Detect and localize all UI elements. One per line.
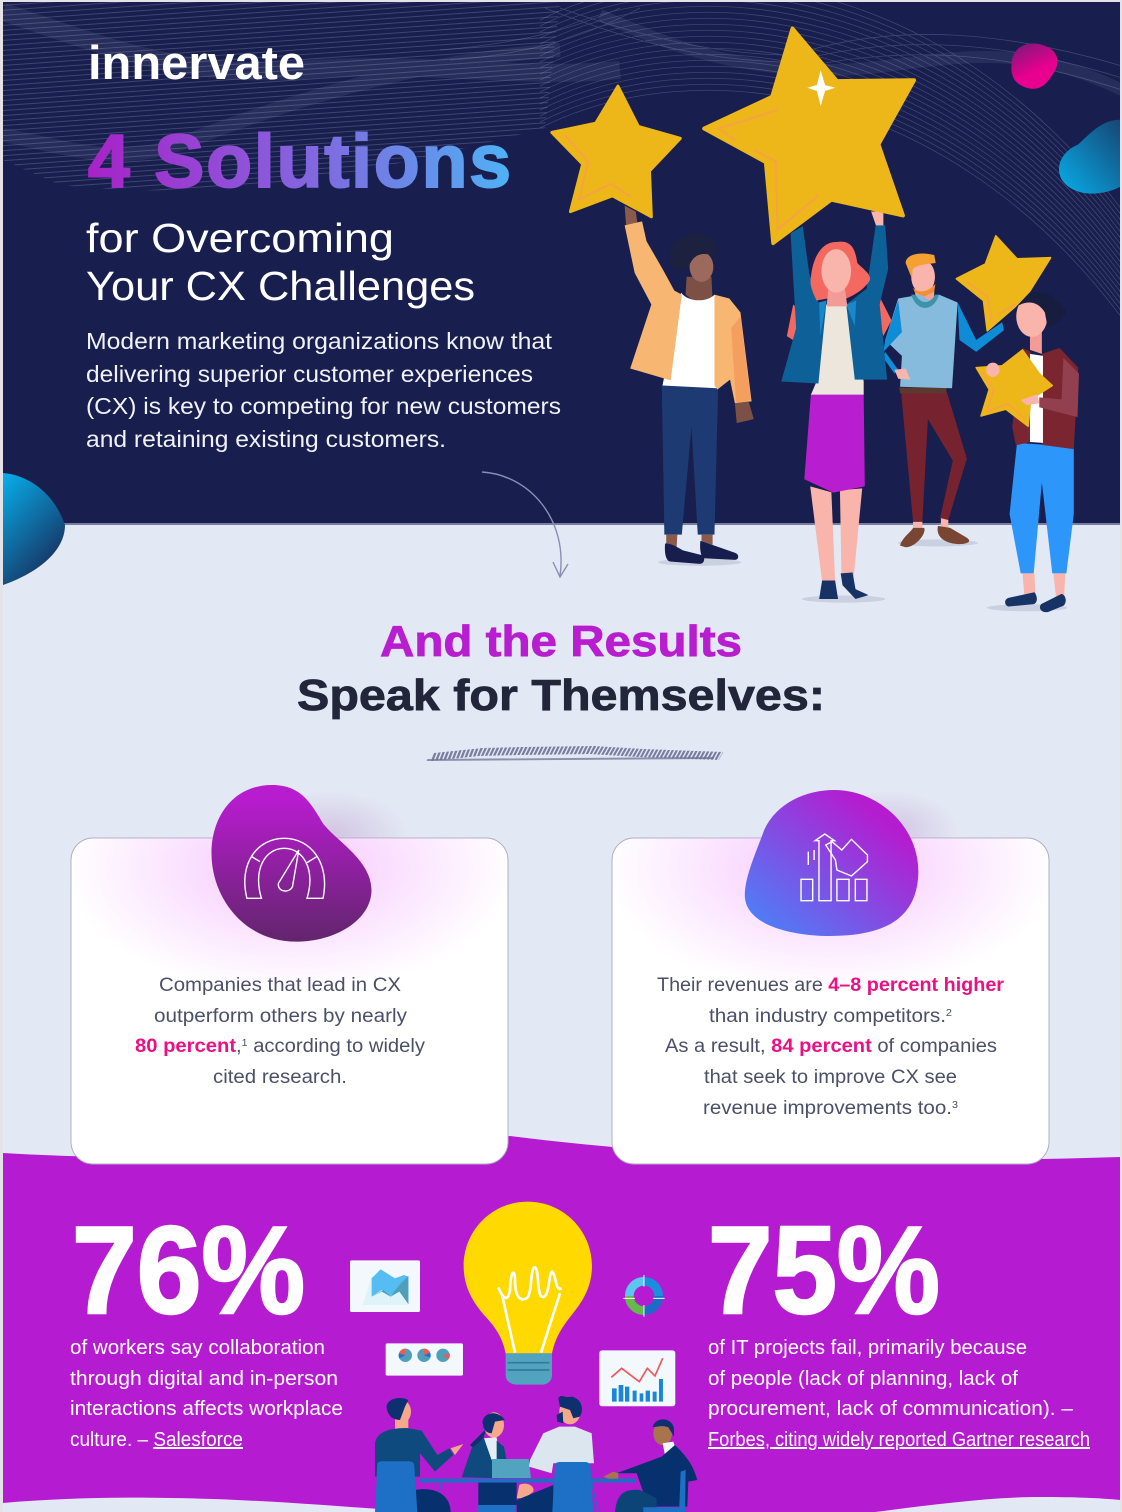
card text: 80 percent , [135, 1036, 241, 1057]
glow [637, 838, 1022, 976]
icon: line and bar chart card [599, 1350, 675, 1406]
soft shadow above cards [310, 798, 944, 838]
person: woman in blue jacket [781, 212, 892, 599]
icon: lightbulb [464, 1202, 592, 1385]
person: man in peach jacket [625, 206, 754, 564]
squiggle divider [427, 750, 724, 760]
stat: 75%: 75% [708, 1202, 940, 1340]
person: man in blue shirt [883, 253, 1004, 547]
bottom left wave [3, 1498, 390, 1512]
title: 4 Solutions: 4 Solutions [88, 119, 511, 203]
card text [135, 975, 426, 1088]
stat text: IT projects [708, 1337, 1090, 1451]
bottom right wave [875, 1497, 1120, 1512]
panel: purple band [3, 1136, 1120, 1512]
subtitle: for Overcoming [86, 215, 394, 261]
ground shadows [658, 539, 1067, 611]
card text: outperform others by nearly [154, 1006, 408, 1027]
card text: Companies that lead in CX [159, 975, 401, 996]
person: man left [375, 1398, 463, 1512]
illustration: team meeting under lightbulb [350, 1202, 697, 1512]
illustration: people holding stars [552, 28, 1079, 612]
star: large [704, 28, 914, 243]
arrow [482, 472, 568, 577]
panel: navy header [3, 0, 1122, 525]
heading: Speak for Themselves: Speak for Themselves: [297, 671, 825, 720]
panel: left stat card [70, 785, 508, 1164]
icon: area chart card [350, 1260, 420, 1312]
card text: that seek to improve CX see [704, 1067, 957, 1088]
stat text: workers: of workers say collaboration [70, 1337, 325, 1359]
subtitle: Your CX Challenges [86, 263, 475, 309]
intro paragraph: (CX) is key to competing for new customers [86, 393, 561, 419]
stat text: workers: culture. – Salesforce [70, 1429, 243, 1451]
card text: 3 [952, 1100, 958, 1111]
star: left [552, 86, 680, 217]
table [420, 1479, 636, 1512]
card text: than industry competitors. [709, 1006, 927, 1027]
glow [97, 838, 482, 976]
person: man right [603, 1419, 697, 1512]
icon: pie charts card [386, 1343, 463, 1376]
blob: blue left [3, 473, 65, 585]
card text: 1 [242, 1038, 248, 1049]
stat text: IT projects: of IT projects fail, primarily because [708, 1337, 1027, 1359]
star: third [956, 236, 1050, 331]
stat text: IT projects: procurement, lack of communication). – [708, 1398, 1074, 1420]
person: woman with laptop [462, 1412, 531, 1512]
subtitle [86, 215, 475, 309]
stat text: workers: through digital and in-person [70, 1368, 338, 1390]
intro paragraph: and retaining existing customers. [86, 426, 446, 452]
blob: pink [1011, 43, 1057, 89]
intro paragraph [86, 328, 561, 452]
blob: blue right [1059, 120, 1122, 194]
heading: And the Results: And the Results [380, 617, 742, 666]
stat: 76%: 76% [72, 1202, 305, 1340]
card text: according to widely [248, 1036, 426, 1057]
card text [657, 975, 1005, 1119]
logo: innervate [88, 36, 305, 89]
card text: Their revenues are 4–8 percent higher [657, 975, 1005, 996]
card text: 2 [946, 1008, 952, 1019]
icon: donut chart [623, 1275, 665, 1317]
stat text: workers: interactions affects workplace [70, 1398, 343, 1420]
card text: revenue improvements too. [703, 1098, 933, 1119]
stat text: workers [70, 1337, 343, 1451]
intro paragraph: delivering superior customer experiences [86, 361, 533, 387]
panel: light body background [3, 525, 1120, 1165]
stat text: IT projects: of people (lack of planning, lack of [708, 1368, 1018, 1390]
stat text: IT projects: Forbes, citing widely reported Gartner research [708, 1429, 1090, 1451]
person: woman with small star [1005, 292, 1079, 612]
card text: As a result, 84 percent of companies [665, 1036, 997, 1057]
blob with gauge icon [212, 785, 371, 942]
card text: cited research. [213, 1067, 347, 1088]
star: held small [976, 350, 1052, 426]
blob with chart and hand icon [745, 790, 918, 936]
panel: right stat card [612, 790, 1050, 1164]
intro paragraph: Modern marketing organizations know that [86, 328, 552, 354]
person: man centre [517, 1396, 594, 1512]
